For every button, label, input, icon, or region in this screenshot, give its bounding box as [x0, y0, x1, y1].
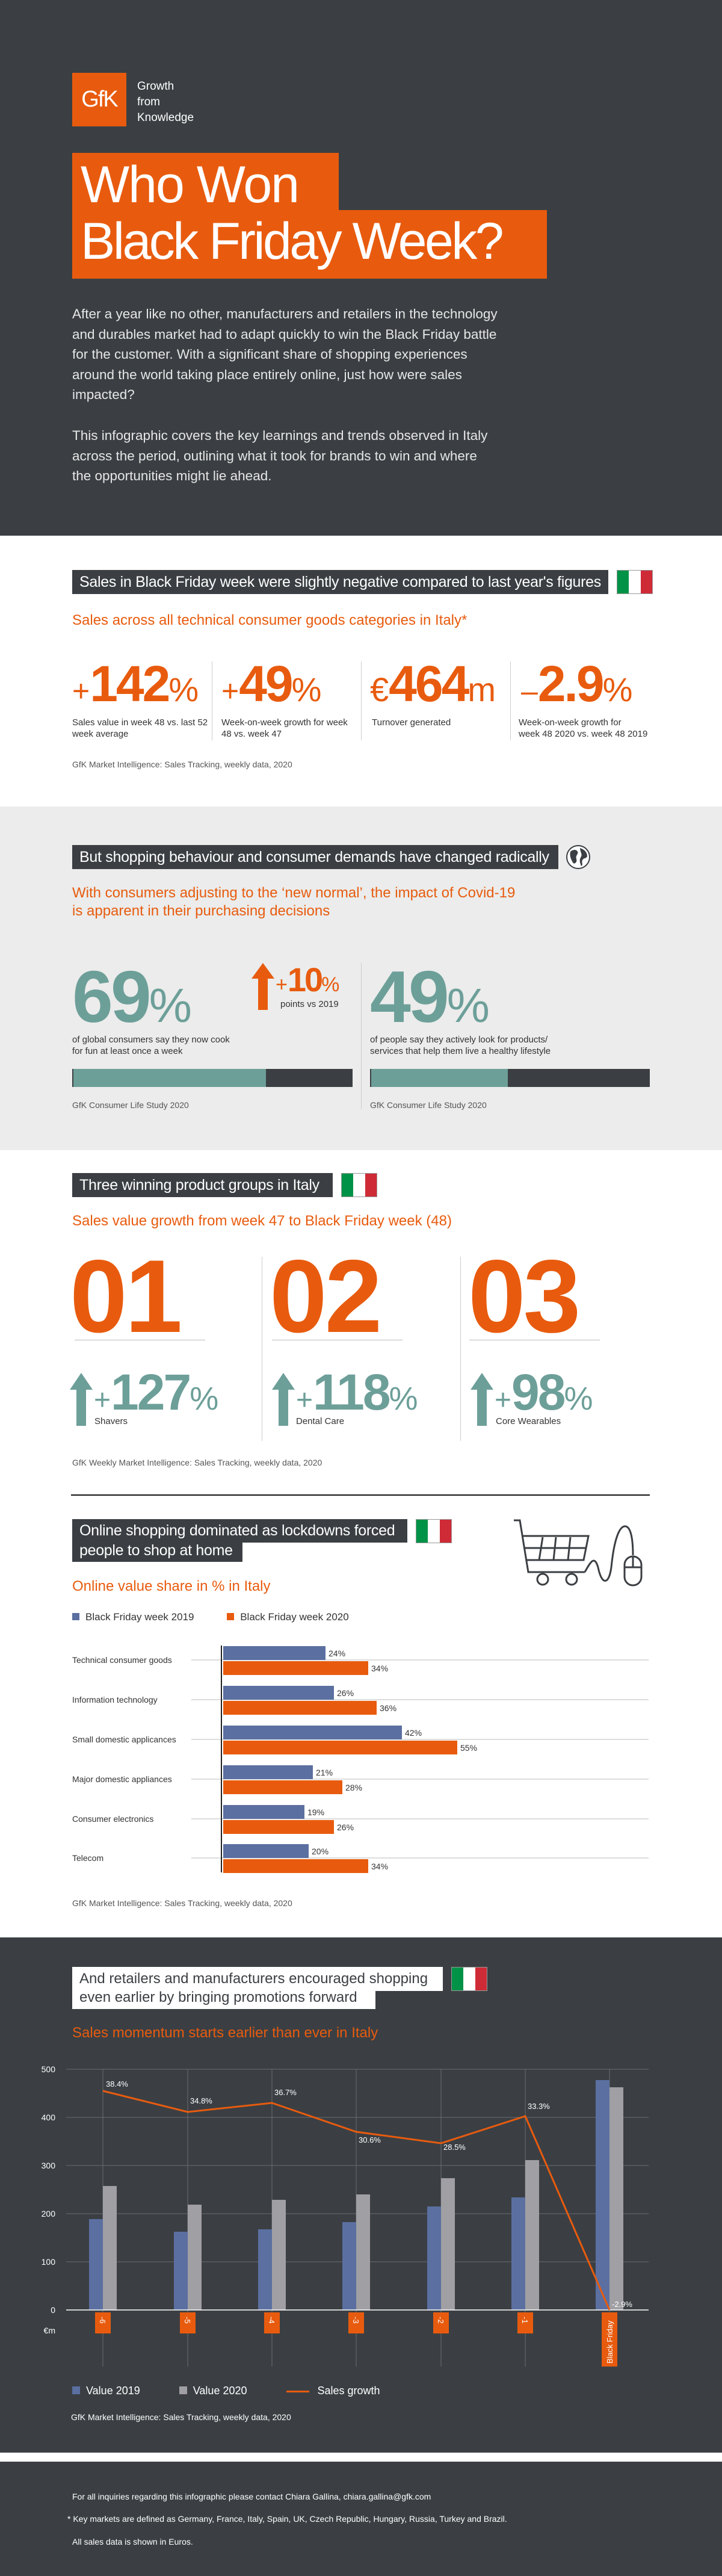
bar chart: online share: 28%: [345, 1783, 362, 1792]
footer: * Key markets are defined as Germany, France, Italy, Spain, UK, Czech Republic, Hungary, Russia, Turkey and Brazil.: [67, 2514, 507, 2524]
bar chart: online share: Consumer electronics: [72, 1814, 153, 1824]
bar chart: online share: 34%: [371, 1862, 388, 1871]
heading: [72, 570, 608, 594]
source: GfK Market Intelligence: Sales Tracking, weekly data, 2020: [71, 2412, 291, 2422]
bar chart: online share: 26%: [337, 1688, 354, 1698]
combo chart: 34.8%: [190, 2096, 212, 2105]
heading: And retailers and manufacturers encouraged shopping: [79, 1971, 428, 1987]
bar chart: online share: Major domestic appliances: [72, 1774, 172, 1784]
bar chart: online share: 21%: [316, 1768, 333, 1777]
icon: italy flag: [451, 1967, 487, 1991]
logo: Growth: [137, 80, 174, 93]
combo chart: -5: [183, 2317, 192, 2324]
heading: Sales in Black Friday week were slightly negative compared to last year's figures: [79, 574, 601, 590]
stat 4: –2.9%: [521, 655, 632, 712]
source: GfK Market Intelligence: Sales Tracking, weekly data, 2020: [72, 1898, 292, 1908]
legend: Value 2019 Value 2020 Sales growth: [86, 2385, 380, 2397]
intro text 2: [72, 428, 487, 483]
heading: people to shop at home: [79, 1542, 233, 1559]
combo chart: 200: [42, 2209, 55, 2218]
intro text 2: across the period, outlining what it took for brands to win and where: [72, 448, 477, 463]
heading: [72, 845, 558, 869]
bar chart: online share: 19%: [307, 1807, 324, 1817]
heading: But shopping behaviour and consumer demands have changed radically: [79, 849, 549, 865]
arrow + 10%: +10%: [276, 961, 339, 999]
bar chart: online share: 55%: [460, 1743, 477, 1753]
bar chart: online share: Information technology: [72, 1695, 158, 1704]
bar chart: online share: 24%: [329, 1649, 345, 1658]
combo chart: -2: [436, 2317, 445, 2324]
logo: Knowledge: [137, 111, 194, 124]
intro text: for the customer. With a significant share of shopping experiences: [72, 347, 467, 362]
desc 49: services that help them live a healthy lifestyle: [370, 1046, 551, 1056]
title: Who Won: [81, 156, 298, 214]
bar chart: online share: 42%: [405, 1728, 422, 1738]
icon: cart and mouse: [514, 1519, 643, 1587]
subtitle: Sales momentum starts earlier than ever in Italy: [72, 2025, 378, 2041]
panel: sales stats: week average: [72, 729, 128, 739]
intro text 2: the opportunities might lie ahead.: [72, 468, 271, 483]
combo chart: -2.9%: [612, 2300, 632, 2309]
heading: Online shopping dominated as lockdowns forced: [79, 1522, 395, 1539]
group 01: 01: [70, 1239, 180, 1354]
desc 49: of people say they actively look for products/: [370, 1035, 548, 1045]
combo chart: -4: [267, 2317, 276, 2324]
progress bar 69: [72, 1069, 353, 1087]
stat 69%: 69%: [72, 956, 192, 1038]
progress bar 49: [370, 1069, 650, 1087]
intro text: around the world taking place entirely online, just how were sales: [72, 367, 462, 382]
panel: sales stats: week 48 2020 vs. week 48 2019: [519, 729, 647, 739]
bar chart: online share: Telecom: [72, 1853, 103, 1863]
combo chart: 100: [42, 2257, 55, 2267]
panel: shopping behaviour: [0, 807, 722, 1150]
desc 69: of global consumers say they now cook: [72, 1035, 230, 1045]
bar chart: online share: 26%: [337, 1822, 354, 1832]
subtitle: is apparent in their purchasing decisions: [72, 903, 330, 919]
group 01: Shavers: [94, 1416, 128, 1426]
sources: GfK Consumer Life Study 2020: [72, 1100, 189, 1110]
icon: globe: [566, 845, 590, 869]
combo chart: 28.5%: [443, 2143, 466, 2152]
intro text 2: This infographic covers the key learnings and trends observed in Italy: [72, 428, 487, 443]
stat 2: +49%: [221, 655, 321, 712]
panel: three winning product groups: [70, 1173, 600, 1467]
footer: All sales data is shown in Euros.: [72, 2537, 193, 2547]
title: [72, 153, 547, 279]
subtitle: [72, 885, 515, 919]
combo chart: -3: [351, 2317, 360, 2324]
stat 49%: 49%: [370, 956, 490, 1038]
group 03: Core Wearables: [496, 1416, 561, 1426]
panel: sales stats: 48 vs. week 47: [221, 729, 282, 739]
subtitle: Online value share in % in Italy: [72, 1578, 271, 1594]
group 01: [70, 1239, 218, 1426]
stat 3: €464m: [370, 655, 496, 712]
source: GfK Market Intelligence: Sales Tracking, weekly data, 2020: [72, 760, 292, 769]
logo: GfK: [81, 87, 117, 112]
stat 1: +142%: [72, 655, 199, 712]
group 02: +118%: [296, 1364, 418, 1420]
combo chart: [41, 2064, 649, 2367]
logo: [72, 73, 194, 126]
combo chart: 33.3%: [528, 2102, 550, 2111]
legend: Black Friday week 2019 Black Friday week 2020: [85, 1611, 349, 1623]
bar chart: online share: Small domestic applicances: [72, 1735, 176, 1744]
panel: promotions forward dark: [0, 1937, 722, 2453]
subtitle: With consumers adjusting to the ‘new normal’, the impact of Covid-19: [72, 885, 515, 901]
heading: Three winning product groups in Italy: [79, 1177, 319, 1194]
icon: italy flag: [341, 1173, 377, 1197]
combo chart: Black Friday: [605, 2320, 614, 2364]
desc 69: for fun at least once a week: [72, 1046, 182, 1056]
group 03: [468, 1239, 600, 1426]
intro text: [72, 306, 498, 402]
combo chart: 500: [42, 2064, 55, 2074]
icon: italy flag: [416, 1519, 452, 1543]
heading: [72, 1967, 443, 2009]
heading: [72, 1173, 333, 1197]
combo chart: 400: [42, 2113, 55, 2122]
subtitle: Sales value growth from week 47 to Black Friday week (48): [72, 1213, 452, 1229]
combo chart: 38.4%: [106, 2079, 128, 2088]
footer: For all inquiries regarding this infographic please contact Chiara Gallina, chiara.gallina@gfk.com: [72, 2492, 431, 2501]
combo chart: -6: [98, 2317, 107, 2324]
combo chart: 300: [42, 2161, 55, 2170]
panel: sales stats: Week-on-week growth for week: [221, 717, 348, 728]
desc 69: [72, 1035, 230, 1056]
combo chart: 0: [51, 2305, 55, 2315]
footer: [0, 2462, 722, 2576]
group 02: Dental Care: [296, 1416, 344, 1426]
panel: intro dark: [0, 0, 722, 536]
combo chart: 36.7%: [274, 2088, 297, 2097]
arrow + 10%: [251, 961, 339, 1010]
panel: sales stats: Week-on-week growth for: [519, 717, 622, 728]
panel: online shopping: [72, 1519, 649, 1908]
group 03: +98%: [495, 1364, 593, 1420]
bar chart: online share: 34%: [371, 1664, 388, 1673]
panel: sales stats: [72, 570, 653, 769]
source: GfK Weekly Market Intelligence: Sales Tracking, weekly data, 2020: [72, 1458, 322, 1467]
group 01: +127%: [94, 1364, 218, 1420]
panel: shopping behaviour: GfK Consumer Life Study 2020: [370, 1100, 487, 1110]
bar chart: online share: Technical consumer goods: [72, 1655, 172, 1665]
bar chart: online share: 20%: [312, 1847, 329, 1856]
intro text: impacted?: [72, 387, 135, 402]
combo chart: -1: [520, 2317, 529, 2324]
intro text: After a year like no other, manufacturers and retailers in the technology: [72, 306, 498, 321]
combo chart: 30.6%: [359, 2135, 381, 2144]
combo chart: €m: [44, 2326, 55, 2335]
desc 49: [370, 1035, 551, 1056]
arrow + 10%: points vs 2019: [280, 999, 339, 1009]
subtitle: Sales across all technical consumer goods categories in Italy*: [72, 612, 467, 628]
group 02: 02: [270, 1239, 380, 1354]
intro text: and durables market had to adapt quickly to win the Black Friday battle: [72, 327, 496, 342]
logo: from: [137, 96, 160, 108]
group 02: [270, 1239, 418, 1426]
bar chart: online share: 36%: [380, 1703, 396, 1713]
title: Black Friday Week?: [81, 212, 502, 270]
heading: even earlier by bringing promotions forward: [79, 1989, 357, 2005]
bar chart: online share: [72, 1646, 649, 1873]
panel: sales stats: Turnover generated: [372, 717, 451, 728]
heading: [72, 1519, 407, 1562]
panel: sales stats: Sales value in week 48 vs. last 52: [72, 717, 208, 728]
icon: italy flag: [617, 570, 653, 594]
group 03: 03: [468, 1239, 578, 1354]
